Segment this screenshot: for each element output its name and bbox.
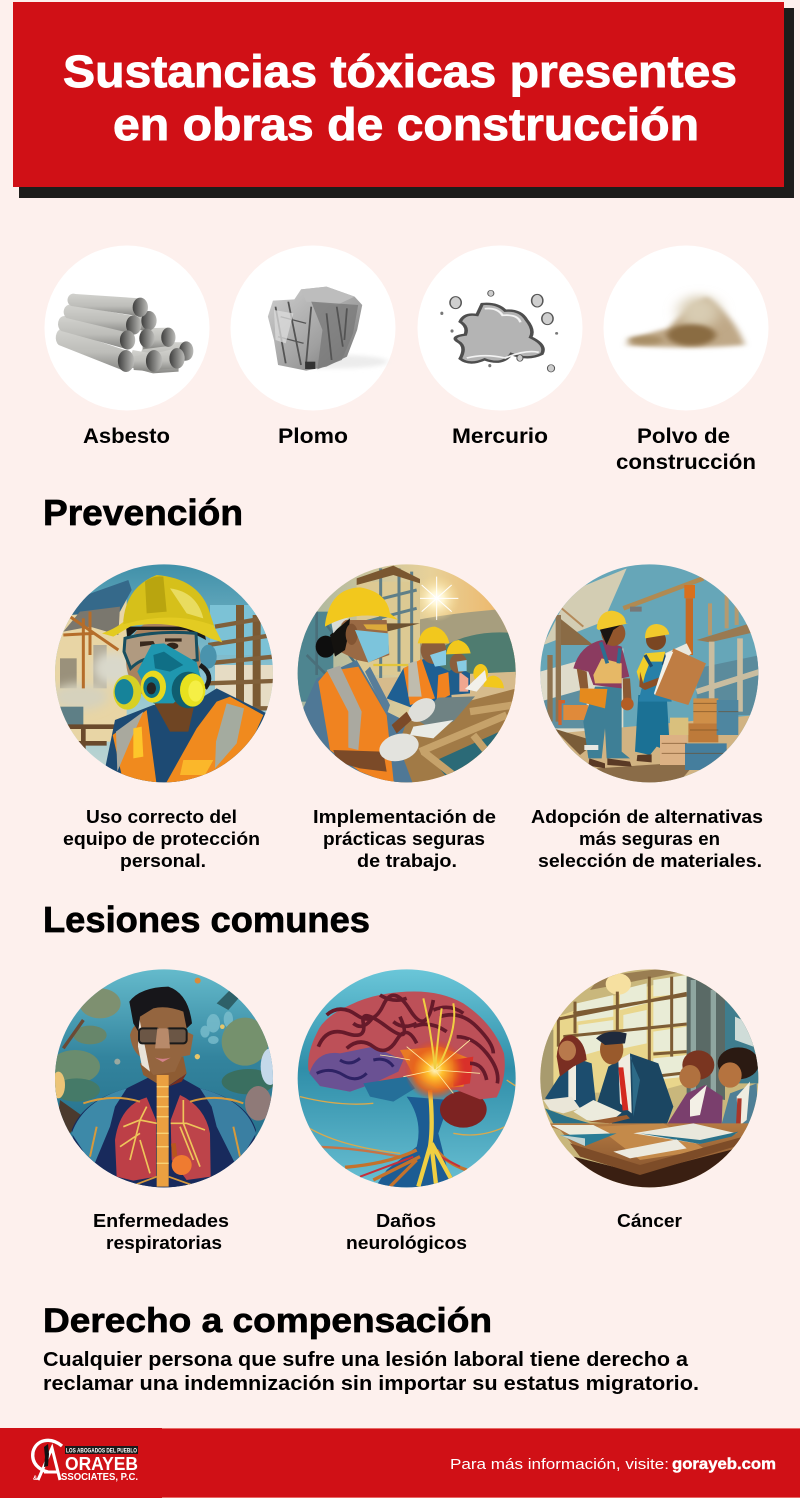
caption: enfermedades respiratorias: Enfermedades <box>93 1210 229 1231</box>
logo: gorayeb and associates: LOS ABOGADOS DEL PUEBLO <box>66 1448 137 1454</box>
text block: compensation right: reclamar una indemnización sin importar su estatus migratorio. <box>43 1372 699 1395</box>
icon: stacked pipes <box>56 294 193 373</box>
caption: prácticas seguras: prácticas seguras <box>323 828 485 849</box>
label: asbesto: Asbesto <box>83 425 170 448</box>
text block: compensation right <box>43 1348 699 1395</box>
label: mercurio: Mercurio <box>452 425 548 448</box>
caption: prácticas seguras <box>313 806 496 871</box>
illustration: man with visible lungs <box>50 967 279 1193</box>
title banner: en obras de construcción <box>113 99 699 150</box>
panel: toxic substances <box>44 246 768 474</box>
text block: compensation right: Cualquier persona que sufre una lesión laboral tiene derecho a <box>43 1348 689 1371</box>
caption: uso correcto: equipo de protección <box>63 828 260 849</box>
label: polvo de construcción <box>616 425 756 474</box>
caption: enfermedades respiratorias: respiratorias <box>106 1232 222 1253</box>
substance: mercurio <box>418 246 582 448</box>
illustration: workers with masks and tablet <box>297 562 520 788</box>
logo: gorayeb and associates: ORAYEB <box>65 1454 138 1474</box>
illustration: workers choosing materials <box>540 562 760 788</box>
caption: alternativas seguras: más seguras en <box>579 828 720 849</box>
caption: prácticas seguras: de trabajo. <box>357 850 457 871</box>
title banner <box>13 2 794 198</box>
footer bar <box>0 1428 800 1498</box>
panel: lesiones comunes <box>50 967 763 1253</box>
caption: uso correcto: Uso correcto del <box>86 806 237 827</box>
illustration: lawyers at table <box>540 967 763 1193</box>
footer link text <box>450 1456 776 1473</box>
caption: daños neurológicos: Daños <box>376 1210 436 1231</box>
caption: alternativas seguras: Adopción de alternativas <box>531 806 763 827</box>
illustration: worker with respirator <box>52 562 277 788</box>
footer link text: gorayeb.com <box>672 1456 776 1473</box>
icon: lead rock <box>268 287 388 371</box>
illustration: brain with neural tree <box>297 967 520 1193</box>
caption: alternativas seguras <box>531 806 763 871</box>
caption: daños neurológicos: neurológicos <box>346 1232 467 1253</box>
caption: enfermedades respiratorias <box>93 1210 229 1253</box>
logo: gorayeb and associates <box>33 1440 138 1483</box>
label: plomo: Plomo <box>278 425 348 448</box>
label: polvo de construcción: construcción <box>616 451 756 474</box>
caption: alternativas seguras: selección de materiales. <box>538 850 762 871</box>
substance: asbesto <box>44 246 210 448</box>
label: polvo de construcción: Polvo de <box>637 425 730 448</box>
section: derecho a compensación <box>43 1302 699 1395</box>
heading: lesiones comunes: Lesiones comunes <box>43 899 370 940</box>
caption: prácticas seguras: Implementación de <box>313 806 496 827</box>
icon: dust cloud <box>625 296 745 347</box>
caption: cáncer: Cáncer <box>617 1210 682 1231</box>
title banner: Sustancias tóxicas presentes <box>63 46 737 97</box>
caption: uso correcto <box>63 806 260 871</box>
panel: prevención <box>52 562 763 871</box>
substance: polvo de construcción <box>604 246 768 474</box>
logo: gorayeb and associates: SSOCIATES, P.C. <box>61 1472 138 1483</box>
logo: gorayeb and associates: & <box>33 1476 38 1482</box>
footer link text: Para más información, visite: <box>450 1456 669 1473</box>
heading: prevención: Prevención <box>43 492 243 533</box>
caption: uso correcto: personal. <box>120 850 206 871</box>
icon: mercury blob <box>440 290 558 372</box>
caption: daños neurológicos <box>346 1210 467 1253</box>
substance: plomo <box>230 246 396 448</box>
heading: derecho a compensación: Derecho a compensación <box>43 1302 492 1340</box>
